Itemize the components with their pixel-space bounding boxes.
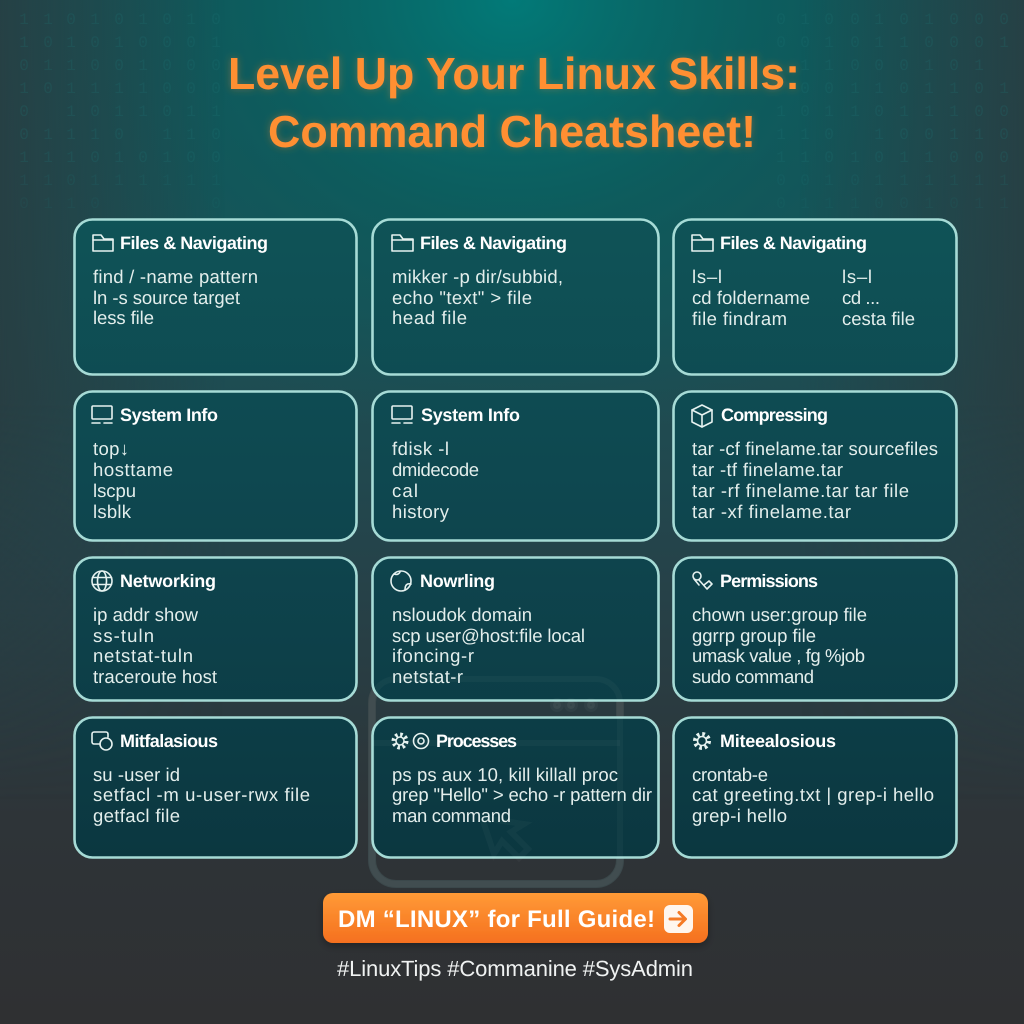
background <box>0 0 1024 776</box>
text block: commands: grep-i hello <box>692 805 787 826</box>
text block: commands: less file <box>93 307 154 328</box>
heading: Files & Navigating <box>420 233 567 253</box>
text block: commands: head file <box>392 307 467 328</box>
text block: commands: history <box>392 501 450 522</box>
panel: miteealosious <box>674 718 956 858</box>
text block: commands: ss-tuln <box>93 625 154 646</box>
binary pattern left: 111010100 <box>19 149 221 167</box>
text block: commands: netstat-tuln <box>93 645 193 666</box>
binary pattern right: 0010110001 <box>776 34 1009 52</box>
text block: commands: cd foldername <box>692 287 810 308</box>
text block: commands: ps ps aux 10, kill killall proc <box>392 764 618 785</box>
text block: commands: nsloudok domain <box>392 604 532 625</box>
text block: commands: file findram <box>692 308 787 329</box>
text block: commands: ifoncing-r <box>392 645 474 666</box>
binary pattern right <box>776 11 1009 213</box>
binary pattern left: 101111000 <box>19 80 221 98</box>
icon: key <box>693 572 712 589</box>
text block: commands: traceroute host <box>93 666 217 687</box>
panel: permissions <box>674 558 956 700</box>
icon: globe outline <box>391 571 411 591</box>
icon: gear <box>695 734 709 748</box>
text block: commands: echo "text" > file <box>392 287 532 308</box>
text block: commands: top↓ <box>93 438 129 459</box>
icon: overlapping shapes <box>92 732 112 750</box>
title: Command Cheatsheet! <box>268 106 756 157</box>
call to action button <box>323 893 708 943</box>
title: Level Up Your Linux Skills: <box>228 48 800 99</box>
binary pattern right: 0111001011 <box>776 195 1009 213</box>
heading: System Info <box>421 405 520 425</box>
text block: commands: setfacl -m u-user-rwx file <box>93 784 310 805</box>
text block: commands: ln -s source target <box>93 287 240 308</box>
text block: commands: chown user:group file <box>692 604 867 625</box>
heading: Nowrling <box>420 571 495 591</box>
text block: commands: grep "Hello" > echo -r pattern dir <box>392 784 652 805</box>
icon: globe <box>92 571 112 591</box>
icon: box <box>692 405 712 427</box>
text block: commands: lscpu <box>93 480 136 501</box>
binary pattern left: 110101010 <box>19 11 221 29</box>
text block: commands: ip addr show <box>93 604 199 625</box>
text block: commands: umask value , fg %job <box>692 645 865 666</box>
icon: monitor <box>392 406 412 423</box>
binary pattern left: 101010001 <box>19 34 221 52</box>
text block: commands <box>692 266 915 329</box>
text block: commands: crontab-e <box>692 764 768 785</box>
panel: nowrling <box>372 558 658 700</box>
text block: commands <box>93 266 258 328</box>
binary pattern right: 11000101 <box>800 57 984 75</box>
watermark: window and cursor overlay <box>372 679 620 884</box>
button label: DM “LINUX” for Full Guide! <box>338 906 655 933</box>
text block: commands: cd ... <box>842 287 880 308</box>
text block: commands: ls–l <box>692 266 722 287</box>
panel: system info 2 <box>372 392 658 540</box>
panel: files and navigating 2 <box>372 220 658 374</box>
text block: commands: getfacl file <box>93 805 180 826</box>
heading: Compressing <box>721 405 828 425</box>
text block: commands <box>692 764 934 826</box>
binary pattern left: 01100 <box>19 195 221 213</box>
heading: Files & Navigating <box>720 233 867 253</box>
text block: commands <box>392 764 652 826</box>
icon: folder <box>93 235 113 251</box>
text block: commands: scp user@host:file local <box>392 625 585 646</box>
text block: commands: cal <box>392 480 418 501</box>
text block: commands <box>692 604 867 687</box>
text block: commands: ls–l <box>842 266 872 287</box>
panel: networking <box>74 558 356 700</box>
text block: commands: find / -name pattern <box>93 266 258 287</box>
icon: folder <box>392 235 413 251</box>
icon: monitor <box>92 406 112 423</box>
watermark: browser window behind cards <box>372 679 620 884</box>
text block: commands: hosttame <box>93 459 173 480</box>
panel: files and navigating 3 <box>674 220 956 374</box>
text block: commands <box>93 764 310 826</box>
heading: Processes <box>436 731 517 751</box>
text block: commands: su -user id <box>93 764 180 785</box>
binary pattern right: 0010111111 <box>776 172 1009 190</box>
text block: commands: tar -cf finelame.tar sourcefiles <box>692 438 938 459</box>
text block: commands: ggrrp group file <box>692 625 816 646</box>
binary pattern right: 1101011000 <box>776 149 1009 167</box>
text block: commands: cesta file <box>842 308 915 329</box>
text block: commands <box>93 604 217 687</box>
heading: Networking <box>120 571 216 591</box>
heading: Mitfalasious <box>120 731 218 751</box>
binary pattern left: 01011011 <box>19 103 221 121</box>
binary pattern right: 0100101000 <box>776 11 1009 29</box>
icon: arrow <box>664 905 693 933</box>
text block: commands <box>392 438 479 522</box>
heading: Miteealosious <box>720 731 836 751</box>
binary pattern right: 110100110 <box>776 126 1009 144</box>
text block: commands: man command <box>392 805 511 826</box>
text block: commands: tar -tf finelame.tar <box>692 459 843 480</box>
text block: commands <box>93 438 173 522</box>
binary pattern left: 011001000 <box>19 57 221 75</box>
binary pattern left: 110111111 <box>19 172 221 190</box>
icon: folder <box>692 235 713 251</box>
heading: Files & Navigating <box>120 233 268 253</box>
text block: commands <box>392 266 563 328</box>
binary pattern right: 001101101 <box>800 80 1009 98</box>
text block: commands <box>692 438 938 522</box>
text block: commands: cat greeting.txt | grep-i hello <box>692 784 934 805</box>
text block: commands: netstat-r <box>392 666 463 687</box>
text block: commands <box>392 604 585 687</box>
binary pattern right: 1011011100 <box>776 103 1009 121</box>
icon: gear and circle <box>394 734 428 748</box>
panel: mitfalasious <box>74 718 356 858</box>
heading: Permissions <box>720 571 818 591</box>
heading: System Info <box>120 405 218 425</box>
binary pattern left <box>19 11 221 213</box>
panel: processes <box>372 718 658 858</box>
panel: compressing <box>674 392 956 540</box>
panel: files and navigating 1 <box>74 220 356 374</box>
panel: system info 1 <box>74 392 356 540</box>
text block: commands: fdisk -l <box>392 438 449 459</box>
binary pattern left: 01110110 <box>19 126 221 144</box>
hashtags: #LinuxTips #Commanine #SysAdmin <box>337 956 693 981</box>
text block: commands: sudo command <box>692 666 814 687</box>
title <box>228 48 800 157</box>
text block: commands: lsblk <box>93 501 132 522</box>
text block: commands: tar -rf finelame.tar tar file <box>692 480 909 501</box>
text block: commands: mikker -p dir/subbid, <box>392 266 563 287</box>
text block: commands: dmidecode <box>392 459 479 480</box>
text block: commands: tar -xf finelame.tar <box>692 501 851 522</box>
